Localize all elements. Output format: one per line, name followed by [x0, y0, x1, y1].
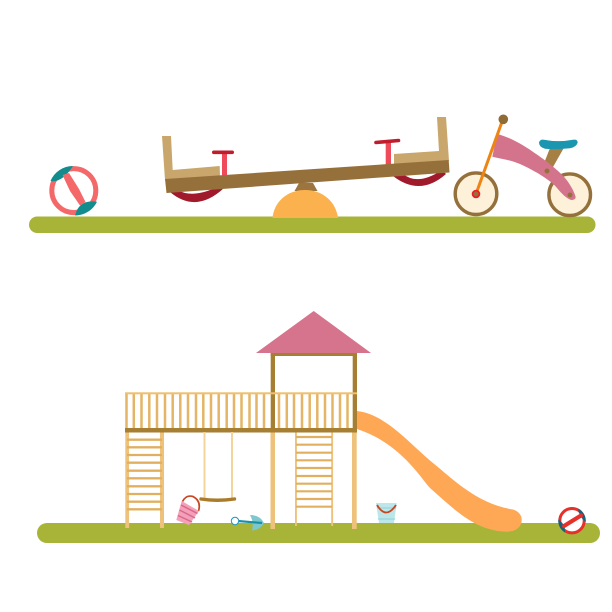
wheel: rear — [549, 174, 590, 216]
deck beam — [125, 428, 357, 432]
roof beam — [271, 353, 357, 356]
tower posts — [271, 353, 357, 432]
hub: front — [473, 191, 479, 197]
ground: top strip — [29, 216, 596, 233]
rocker: left — [170, 183, 224, 202]
railing top rail — [125, 392, 357, 394]
right ladder — [295, 430, 333, 526]
shovel: teal — [231, 515, 264, 530]
fork — [476, 119, 503, 194]
seat — [539, 140, 578, 149]
rocker: right — [393, 170, 446, 186]
roof — [256, 311, 371, 353]
left ladder — [125, 430, 164, 528]
handle: left — [212, 150, 234, 177]
handlebar knob — [498, 114, 508, 124]
seesaw — [162, 117, 450, 218]
seat: right — [394, 117, 449, 164]
support posts — [270, 430, 357, 529]
seat: left — [162, 136, 220, 180]
wheel: front — [455, 173, 497, 214]
balance bike — [455, 114, 590, 216]
ground: bottom strip — [37, 523, 600, 543]
plank — [165, 160, 450, 193]
seat post — [544, 148, 564, 167]
frame — [492, 134, 576, 200]
handle: right — [376, 140, 398, 166]
bolt: frame — [544, 168, 550, 174]
slide — [357, 411, 522, 532]
hub: rear — [568, 192, 572, 198]
fulcrum: brown mount — [294, 183, 318, 191]
swing — [201, 432, 234, 500]
bucket: pink — [176, 496, 199, 525]
play tower — [125, 311, 371, 529]
bucket: blue — [376, 503, 397, 523]
railing balusters — [126, 394, 348, 429]
ball: red and blue — [558, 508, 586, 533]
ball: pink and teal beach ball — [50, 166, 97, 216]
fulcrum: orange dome — [272, 190, 338, 218]
